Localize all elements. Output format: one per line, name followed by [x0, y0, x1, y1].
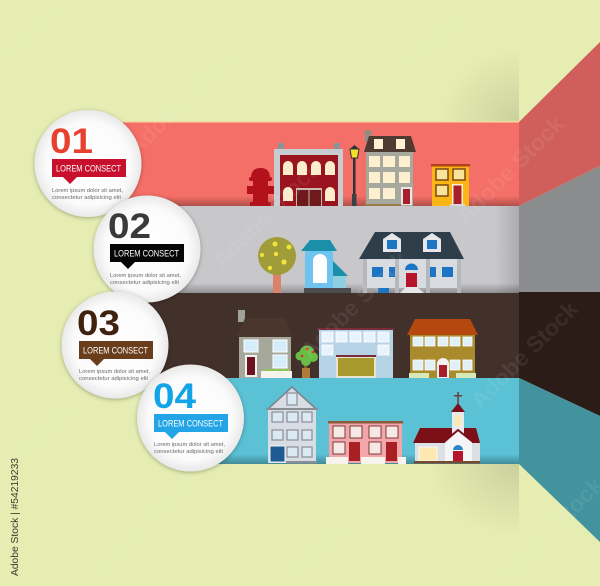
- description 01: Lorem ipsum dolor sit amet,: [52, 188, 123, 194]
- watermark: Adobe Stock: [451, 111, 569, 229]
- panel: step 01: [34, 110, 142, 217]
- perspective wall: teal: [519, 378, 600, 542]
- description 04: [154, 442, 225, 455]
- description 03: [79, 369, 150, 382]
- number 03: 03: [77, 304, 120, 343]
- building: yellow house: [431, 164, 470, 206]
- description 03: consectetur adipisicing elit: [79, 376, 148, 382]
- perspective wall: red: [519, 42, 600, 206]
- band: teal: [190, 378, 519, 464]
- panel: step 02: [94, 196, 200, 302]
- icon: round tree: [258, 237, 296, 293]
- building: pale blue office: [318, 328, 394, 378]
- watermark: Adobe Stock: [465, 296, 583, 414]
- watermark: Adobe Stock: [295, 246, 413, 364]
- watermark: Adobe: [10, 395, 79, 464]
- watermark: Adobe Stock: [85, 466, 203, 584]
- watermark: Adobe Stock: [207, 156, 325, 274]
- building: large colonial house: [359, 232, 464, 293]
- building: church: [413, 392, 480, 464]
- watermark: Adobe Stock: [122, 43, 240, 161]
- shadow below bands: [430, 464, 519, 536]
- watermark: Adobe: [285, 515, 354, 584]
- building: red brick: [274, 143, 343, 206]
- perspective wall: gray: [519, 166, 600, 292]
- number 01: 01: [50, 122, 93, 161]
- band: gray: [150, 206, 519, 293]
- description 03: Lorem ipsum dolor sit amet,: [79, 369, 150, 375]
- panel: step 04: [137, 364, 244, 472]
- building: gray townhouse: [364, 130, 416, 206]
- description 01: [52, 188, 123, 201]
- band: red: [110, 121, 519, 206]
- description 02: consectetur adipisicing elit: [110, 280, 179, 286]
- number 02: 02: [108, 207, 151, 246]
- description 04: consectetur adipisicing elit: [154, 449, 223, 455]
- stock credit: Adobe Stock | #54219233: [9, 458, 21, 576]
- building: pink row houses: [326, 421, 406, 464]
- band: brown: [130, 293, 519, 378]
- icon: fire hydrant: [247, 168, 274, 206]
- icon: apple tree in pot: [296, 346, 318, 378]
- description 01: consectetur adipisicing elit: [52, 195, 121, 201]
- building: tall gabled house: [266, 387, 318, 464]
- description 02: Lorem ipsum dolor sit amet,: [110, 273, 181, 279]
- description 04: Lorem ipsum dolor sit amet,: [154, 442, 225, 448]
- shadow above bands: [440, 50, 519, 122]
- perspective wall: brown: [519, 292, 600, 416]
- label badge 02: LOREM CONSECT: [114, 248, 179, 260]
- panel: step 03: [62, 292, 168, 398]
- description 02: [110, 273, 181, 286]
- building: blue cottage: [301, 240, 351, 293]
- building: ochre apartment: [407, 319, 478, 378]
- icon: street lamp: [350, 145, 359, 206]
- building: gray brown-roof house: [237, 310, 293, 378]
- label badge 03: LOREM CONSECT: [83, 346, 148, 356]
- watermark: Adobe: [398, 5, 467, 74]
- number 04: 04: [153, 377, 197, 416]
- label badge 04: LOREM CONSECT: [158, 418, 223, 430]
- label badge 01: LOREM CONSECT: [56, 164, 121, 174]
